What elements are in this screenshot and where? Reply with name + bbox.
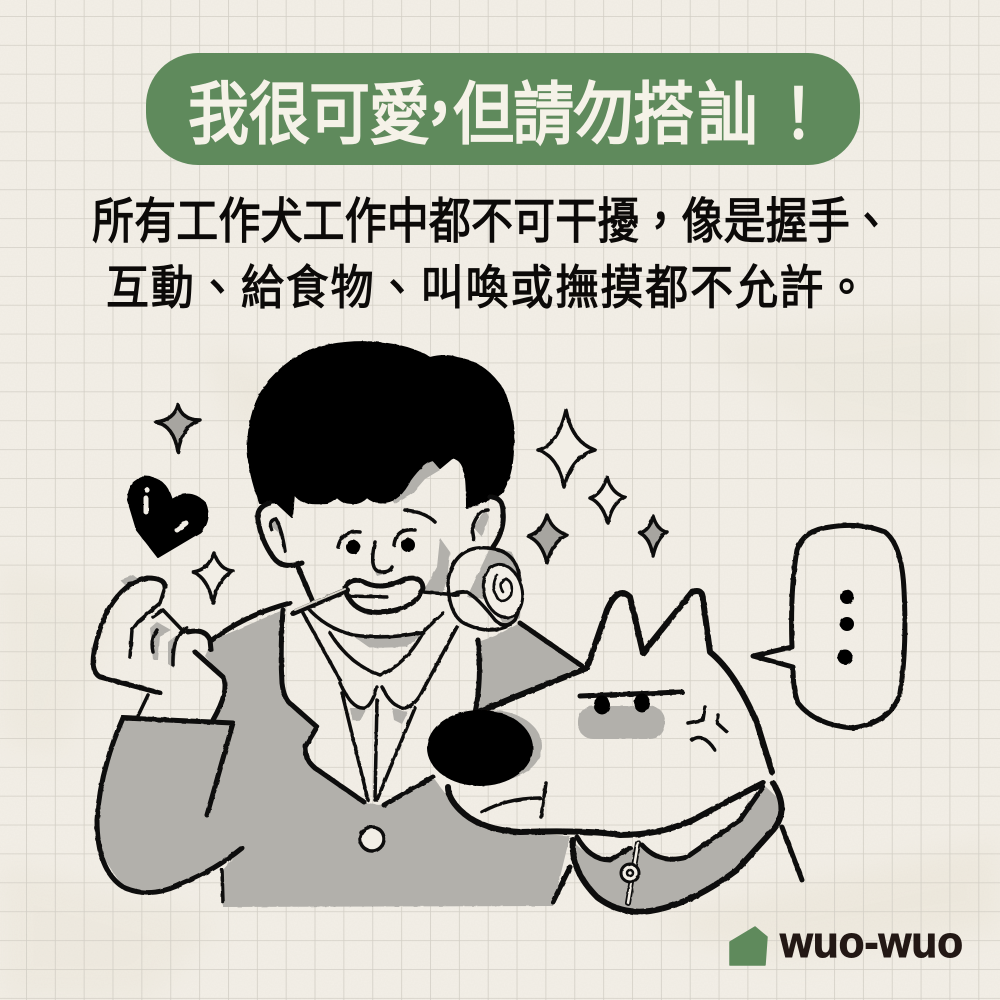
dog nose xyxy=(427,710,533,786)
man: hair xyxy=(248,342,513,517)
logo wordmark: wuo-wuo xyxy=(779,918,963,967)
man: suit and collar xyxy=(97,603,582,902)
dog collar xyxy=(553,783,802,912)
bubble dots xyxy=(838,590,854,664)
heart xyxy=(128,477,208,557)
speech bubble xyxy=(753,525,905,728)
logo house icon xyxy=(730,927,767,965)
title banner xyxy=(146,53,860,165)
man: face and ears xyxy=(258,497,503,637)
sparkles xyxy=(156,405,667,603)
intro text: 互動、給食物、叫喚或撫摸都不允許。 xyxy=(106,261,868,314)
illustration xyxy=(93,342,905,913)
dog head outline xyxy=(448,591,772,835)
intro text: 所有工作犬工作中都不可干擾，像是握手、 xyxy=(92,194,892,249)
suit button xyxy=(360,827,384,851)
logo xyxy=(730,918,963,967)
banner pill xyxy=(146,53,860,165)
man: eyes xyxy=(346,538,415,554)
rose xyxy=(293,548,528,630)
dog face xyxy=(482,692,727,817)
dog eyes xyxy=(594,694,650,714)
hand xyxy=(93,578,225,720)
dog xyxy=(427,591,802,912)
title text: 我很可愛，但請勿搭訕！ xyxy=(188,76,829,153)
intro text xyxy=(92,194,892,314)
gray shading xyxy=(97,457,783,913)
